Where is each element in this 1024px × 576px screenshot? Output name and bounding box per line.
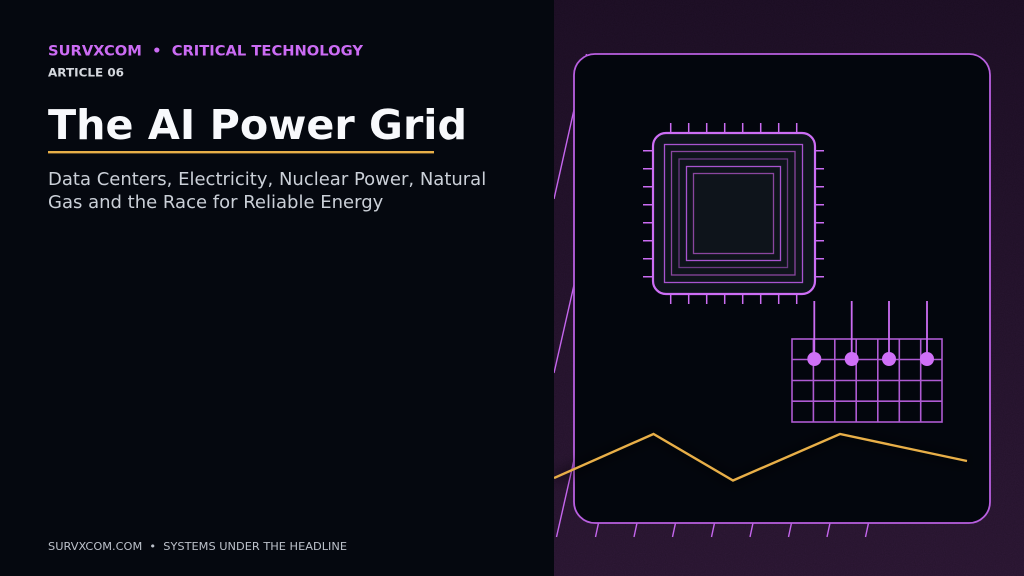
subtitle xyxy=(48,169,486,213)
chip body xyxy=(653,133,815,294)
grid lines xyxy=(792,339,942,422)
right textured background panel xyxy=(554,0,1024,576)
main illustration panel xyxy=(574,54,990,523)
subtitle: Data Centers, Electricity, Nuclear Power, Natural xyxy=(48,169,486,190)
eyebrow label: SURVXCOM • CRITICAL TECHNOLOGY xyxy=(48,44,363,60)
article number: ARTICLE 06 xyxy=(48,66,124,80)
diagonal circuit traces xyxy=(554,54,868,537)
connector stems xyxy=(814,301,927,359)
icon: processor chip xyxy=(643,123,824,304)
title underline xyxy=(48,151,434,153)
chart: gold power line xyxy=(554,434,967,480)
subtitle: Gas and the Race for Reliable Energy xyxy=(48,192,384,213)
left background panel xyxy=(0,0,554,576)
chart: switch grid xyxy=(792,301,942,422)
footer: SURVXCOM.COM • SYSTEMS UNDER THE HEADLINE xyxy=(48,540,347,553)
title: The AI Power Grid xyxy=(48,101,467,149)
chip nested squares xyxy=(664,144,802,282)
connector nodes xyxy=(807,352,934,366)
chip pins xyxy=(643,123,824,304)
